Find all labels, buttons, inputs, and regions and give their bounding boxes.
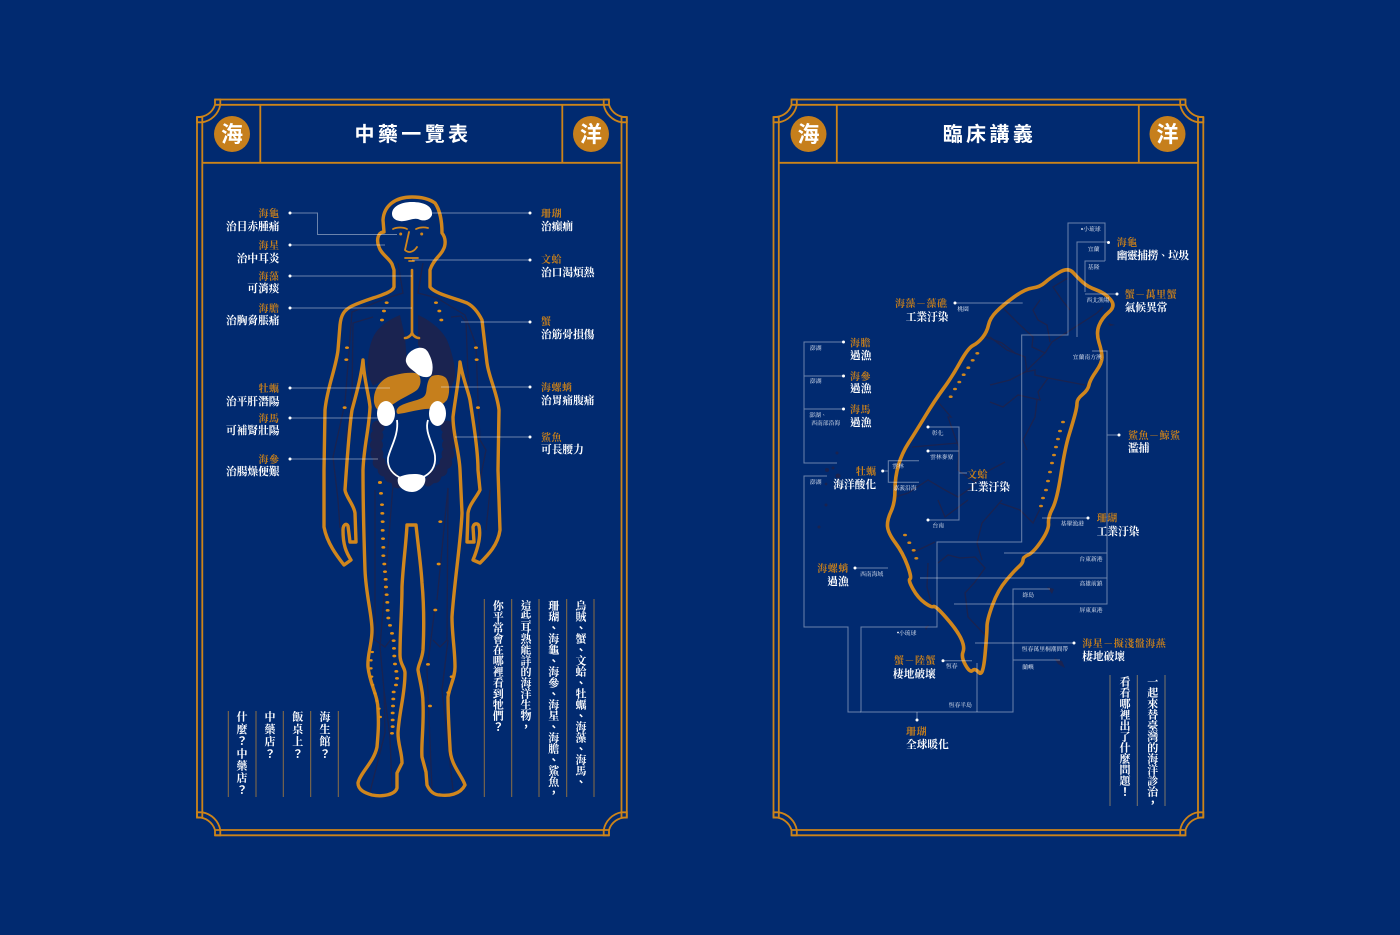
map of Taiwan [804, 223, 1120, 722]
place names: 台南 [932, 522, 944, 530]
icon: ocean badge: 洋 [1156, 122, 1179, 147]
panel frame [197, 100, 627, 835]
text block: call to action [1110, 675, 1165, 808]
labels: left remedies: 治胸脅脹痛 [226, 314, 280, 327]
labels: threats: 文蛤 [967, 468, 988, 481]
labels: right remedies: 治口渴煩熱 [541, 266, 596, 279]
text block: places: 什麼 ？ 中藥店 ？ [235, 710, 248, 796]
text block: intro [484, 599, 594, 798]
labels: right remedies: 海螺蛸 [541, 381, 572, 394]
labels: threats: 工業汙染 [1097, 525, 1140, 538]
place names: 雲林 [892, 462, 904, 470]
labels: threats: 過漁 [850, 349, 873, 362]
coastline [887, 270, 1113, 673]
icon: sea badge: 海 [797, 122, 820, 147]
text block: places: 中藥店 ？ [263, 710, 276, 760]
place names: 西南部沿海 [811, 419, 840, 427]
place names: 恆春半島 [949, 701, 972, 709]
labels: threats: 海螺蛸 [817, 562, 849, 575]
text block: places: 海生館 ？ [318, 710, 330, 760]
place names: 台東新港 [1079, 555, 1103, 563]
labels: left remedies: 海馬 [258, 412, 280, 425]
labels: right remedies: 蟹 [541, 315, 552, 328]
labels: threats: 幽靈捕撈、垃圾 [1117, 249, 1189, 262]
organ: heart [406, 348, 433, 377]
place names: 桃園 [957, 305, 969, 313]
title: 中藥一覽表 [354, 123, 472, 146]
text block: places: 飯桌上 ？ [291, 710, 303, 760]
place names: 宜蘭南方澳 [1073, 353, 1102, 361]
place names: 嘉義沿海 [893, 484, 917, 492]
icon: sea badge: 海 [221, 122, 243, 147]
islands [818, 323, 1115, 668]
labels: left remedies: 可補腎壯陽 [226, 424, 280, 437]
panel frame [774, 100, 1203, 835]
map leader lines [804, 223, 1119, 720]
organ: intestine [376, 427, 448, 482]
labels: threats: 珊瑚 [1097, 512, 1118, 524]
labels: threats: 蟹－陸蟹 [894, 654, 936, 667]
acupuncture points: torso left [343, 301, 389, 484]
organ: liver [374, 373, 421, 411]
text block: intro: 烏賊 、 蟹 、 文蛤 、 牡蠣 、 海藻 、 海馬 、 [574, 599, 586, 787]
labels: right remedies: 鯊魚 [541, 431, 562, 444]
labels: threats: 海洋酸化 [833, 478, 876, 491]
labels: left remedies: 治平肝潛陽 [226, 395, 280, 408]
text block: intro: 這些耳熟能詳的海洋生物 ， [519, 599, 532, 732]
icon: ocean badge [1150, 116, 1186, 152]
icon: ocean badge: 洋 [580, 122, 602, 147]
panel: medicine chart [197, 100, 627, 835]
organ: bladder [398, 474, 425, 492]
labels: right remedies: 文蛤 [541, 253, 562, 266]
labels: threats: 過漁 [827, 575, 850, 588]
labels: threats: 珊瑚 [906, 725, 927, 738]
organ: brain [392, 202, 432, 221]
labels: threats: 蟹－萬里蟹 [1125, 288, 1178, 301]
place names: 綠島 [1022, 591, 1034, 599]
labels: threats: 棲地破壞 [893, 668, 936, 680]
place names: 高雄前鎮 [1079, 580, 1103, 588]
labels: threats: 海龜 [1117, 236, 1138, 249]
labels: left remedies: 海龜 [258, 207, 280, 220]
icon: ocean badge [573, 116, 609, 152]
labels: left remedies: 海藻 [258, 270, 280, 283]
labels: left remedies: 治腸燥便艱 [226, 465, 280, 478]
organ: lungs [368, 315, 455, 391]
place names: 雲林麥寮 [930, 453, 953, 461]
labels: threats: 海星－擬淺盤海燕 [1082, 637, 1167, 650]
labels: threats [817, 236, 1189, 751]
map leader dots [842, 228, 1120, 722]
leader dots [288, 212, 532, 460]
labels: left remedies: 治目赤腫痛 [226, 220, 280, 233]
text block: intro: 你平常會在哪裡看到牠們 ？ [491, 599, 504, 732]
organ: ureters [388, 420, 435, 479]
labels: right remedies: 治胃痛腹痛 [541, 394, 595, 407]
place names: 屏東東港 [1079, 606, 1103, 614]
text block: places [228, 710, 338, 797]
place names: 宜蘭 [1088, 245, 1100, 253]
labels: right remedies [541, 207, 596, 456]
labels: right remedies: 可長腰力 [541, 443, 584, 456]
place names: 基翬漁港 [1061, 520, 1084, 528]
fishery dots [903, 352, 1065, 560]
body diagram [324, 197, 500, 796]
place names: 基隆 [1088, 263, 1100, 271]
text block: intro: 珊瑚 、 海龜 、 海參 、 海星 、 海膽 、 鯊魚 ， [546, 600, 559, 798]
thin body channels [333, 263, 490, 792]
place names: 澎湖 [810, 478, 822, 486]
labels: threats: 工業汙染 [906, 310, 949, 324]
title: 臨床講義 [943, 122, 1036, 146]
labels: threats: 全球暖化 [906, 738, 949, 751]
labels: left remedies [226, 207, 281, 478]
labels: threats: 海馬 [850, 403, 871, 416]
acupuncture points: legs [369, 481, 454, 735]
organ: kidneys [377, 401, 446, 426]
acupuncture points: torso right [434, 301, 480, 409]
labels: threats: 過漁 [850, 416, 873, 429]
text block: call to action: 一起來替臺灣的海洋診治 ， [1146, 676, 1158, 808]
icon: sea badge [790, 116, 826, 152]
place names: 澎湖 [810, 377, 822, 385]
labels: threats: 氣候異常 [1125, 301, 1168, 314]
labels: left remedies: 海星 [258, 239, 280, 252]
icon: sea badge [214, 116, 250, 152]
place names: 小琉球 [1083, 225, 1101, 233]
labels: threats: 過漁 [850, 382, 873, 395]
place names: 西南海域 [860, 570, 883, 578]
place names: 彰化 [932, 429, 944, 437]
labels: left remedies: 海膽 [258, 302, 280, 315]
face and trachea [393, 227, 428, 338]
labels: left remedies: 可消痰 [247, 282, 280, 295]
place names: 澎湖、 [809, 411, 827, 419]
organ: stomach [397, 375, 449, 414]
place names: 小琉球 [899, 629, 917, 637]
labels: right remedies: 珊瑚 [541, 207, 562, 220]
labels: left remedies: 牡蠣 [258, 382, 280, 395]
labels: right remedies: 治癲癇 [541, 220, 573, 233]
labels: threats: 棲地破壞 [1082, 650, 1125, 663]
labels: threats: 海膽 [850, 336, 871, 350]
place names: 恆春 [946, 662, 958, 670]
labels: threats: 海藻－藻礁 [895, 297, 948, 310]
panel: clinical lecture map [774, 100, 1203, 835]
labels: threats: 濫捕 [1128, 442, 1150, 454]
place names [809, 225, 1110, 709]
labels: left remedies: 海參 [258, 453, 280, 466]
labels: left remedies: 治中耳炎 [237, 252, 281, 265]
labels: threats: 鯊魚－鯨鯊 [1128, 429, 1182, 442]
text block: call to action: 看看哪裡出了什麼問題 ！ [1118, 675, 1130, 797]
labels: right remedies: 治筋骨損傷 [541, 328, 595, 341]
labels: threats: 海參 [850, 370, 872, 383]
labels: threats: 工業汙染 [967, 480, 1010, 494]
place names: 恆春萬里桐潮間帶 [1022, 645, 1068, 653]
labels: threats: 牡蠣 [856, 465, 877, 478]
leader lines [290, 213, 530, 459]
place names: 澎湖 [810, 344, 822, 352]
place names: 西北漁場 [1086, 296, 1110, 304]
body outline [324, 197, 500, 796]
place names: 蘭嶼 [1022, 663, 1034, 671]
county boundaries [895, 278, 1103, 635]
